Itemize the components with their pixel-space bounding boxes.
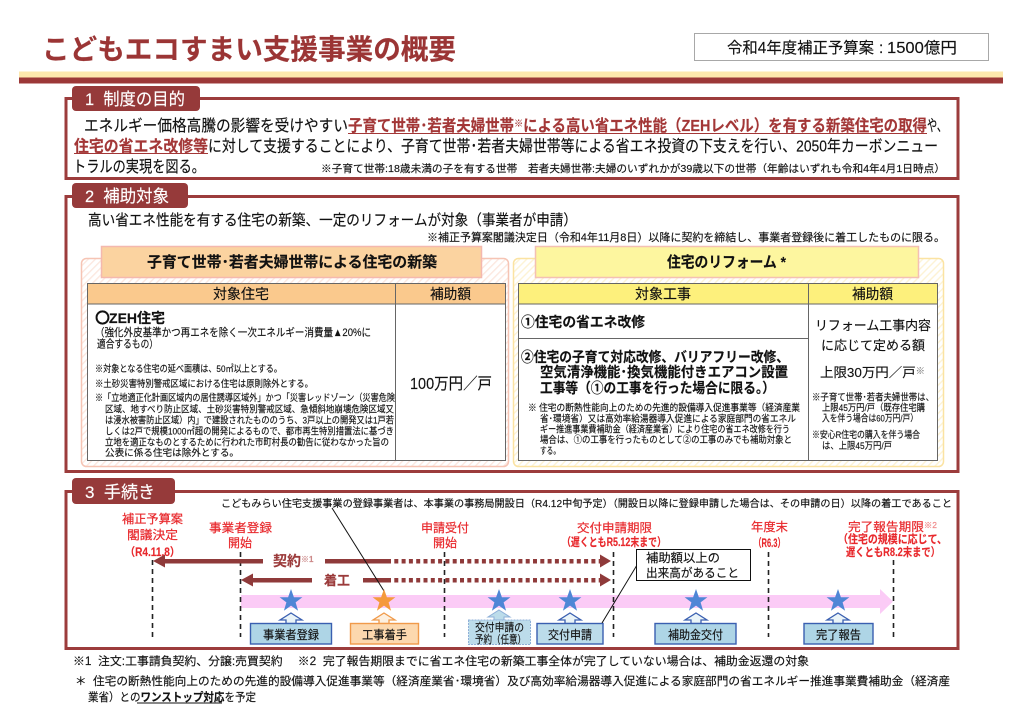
- table: renovation: ※: [916, 366, 925, 376]
- footnote: one-stop service: 業省）とのワンストップ対応を予定: [88, 690, 256, 704]
- header: renovation: [536, 246, 918, 278]
- step: 交付申請の予約: [468, 610, 530, 646]
- table: renovation: する。: [540, 446, 560, 457]
- heading: 2 eligibility: 2 補助対象: [85, 187, 169, 206]
- step: 交付申請の予約: 交付申請の: [475, 620, 524, 634]
- table: new housing: は浸水被害防止区域）内」で建設されたもののうち、3戸以上の開発又は1戸若: [105, 414, 394, 426]
- stars: [280, 589, 849, 611]
- step: 事業者登録: [250, 613, 332, 644]
- table: renovation: 省･環境省）又は高効率給湯器導入促進による家庭部門の省エネル: [540, 413, 796, 425]
- step: 完了報告: [804, 613, 873, 644]
- note: registered businesses: こどもみらい住宅支援事業の登録事業者は、本事業の事務局開設日（R4.12中旬予定）（開設日以降に登録申請した場合は、その申請の日）以降の着工であること: [221, 497, 952, 510]
- table: new housing: 〇ZEH住宅: [95, 307, 165, 328]
- step: 完了報告: 完了報告: [816, 628, 861, 642]
- table: new housing: 適合するもの）: [97, 336, 158, 350]
- panel: 1 purpose: [66, 86, 958, 178]
- panel: 3 procedure: [66, 478, 958, 648]
- footnote: one-stop service: 住宅の断熱性能向上のための先進的設備導入促進事業等（経済産業省･環境省）及び高効率給湯器導入促進による家庭部門の省エネルギー推進事業費補助金（経済産: [93, 674, 950, 688]
- text: purpose body: トラルの実現を図る。: [73, 158, 205, 176]
- subpanel: renovation: [514, 246, 944, 466]
- budget box: 令和4年度補正予算案: [727, 38, 874, 57]
- table: renovation: ※ 住宅の断熱性能向上のための先進的設備導入促進事業等（経済産業: [528, 402, 800, 414]
- milestone labels: 年度末: [751, 520, 788, 534]
- note: household definitions: ※子育て世帯:18歳未満の子を有する世帯 若者夫婦世帯:夫婦のいずれかが39歳以下の世帯（年齢はいずれも令和4年4月1日時点）: [321, 162, 945, 175]
- table: renovation: ※子育て世帯･若者夫婦世帯は、: [812, 392, 934, 404]
- milestone dashed lines: [152, 552, 894, 637]
- arrow: contract: ※1: [301, 555, 314, 564]
- table: renovation: 補助額: [852, 286, 893, 302]
- table: new housing: [88, 284, 506, 460]
- text: purpose body: ※: [514, 119, 523, 130]
- table: renovation: は、上限45万円/戸: [822, 441, 892, 452]
- milestone labels: 完了報告期限: [848, 520, 920, 534]
- callout: work completed: [602, 550, 750, 623]
- table: renovation: リフォーム工事内容: [815, 318, 931, 333]
- budget box: :: [879, 40, 883, 57]
- table: new housing: 補助額: [430, 286, 471, 302]
- table: new housing: ※「立地適正化計画区域内の居住誘導区域外」かつ「災害レッドゾーン（災害危険: [95, 392, 395, 404]
- title: こどもエコすまい支援事業の概要: [42, 34, 456, 65]
- heading: 1 purpose: 1 制度の目的: [85, 90, 185, 109]
- header: new housing: [102, 246, 482, 278]
- step: 工事着手: 工事着手: [362, 627, 407, 642]
- milestone labels: 開始: [228, 536, 252, 550]
- table: new housing: 対象住宅: [213, 286, 269, 302]
- subpanel: new housing: [82, 246, 508, 466]
- table: new housing: ※対象となる住宅の延べ面積は、50㎡以上とする。: [95, 363, 282, 375]
- step: 事業者登録: 事業者登録: [263, 627, 319, 642]
- table: renovation: ギー推進事業費補助金（経済産業省）により住宅の省エネ改修を行う: [540, 424, 790, 436]
- table: new housing: しくは2戸で規模1000㎡超の開発によるもので、都市再生特別措置法に基づき: [105, 426, 394, 438]
- milestone labels: 申請受付: [421, 521, 469, 535]
- callout: work completed: 出来高があること: [646, 565, 739, 580]
- table: new housing: 立地を適正なものとするために行われた市町村長の勧告に従わなかった旨の: [105, 436, 389, 448]
- milestone labels: （住宅の規模に応じて、: [838, 532, 947, 546]
- table: new housing: 100万円／戸: [410, 376, 492, 393]
- arrow: contract: [153, 553, 611, 569]
- table: renovation: 上限45万円/戸（既存住宅購: [822, 402, 925, 414]
- table: new housing: ※土砂災害特別警戒区域における住宅は原則除外とする。: [95, 378, 313, 390]
- table: renovation: 上限30万円／戸: [820, 365, 912, 380]
- table: new housing: 公表に係る住宅は除外とする。: [105, 447, 239, 459]
- budget box: 1500億円: [887, 39, 957, 57]
- table: renovation: ①住宅の省エネ改修: [521, 312, 645, 332]
- milestone labels: 開始: [433, 536, 457, 550]
- text: purpose body: や、: [927, 117, 947, 135]
- arrow: construction start: [241, 573, 611, 588]
- milestone labels: 事業者登録: [209, 520, 272, 535]
- text: eligibility summary: 高い省エネ性能を有する住宅の新築、一定のリフォームが対象（事業者が申請）: [88, 211, 577, 229]
- timeline band arrow: [241, 589, 893, 614]
- header: new housing: 子育て世帯･若者夫婦世帯による住宅の新築: [147, 253, 437, 271]
- text: purpose body: 子育て世帯･若者夫婦世帯: [348, 118, 532, 135]
- table: renovation: ※安心R住宅の購入を伴う場合: [812, 429, 920, 441]
- leader line: registered businesses note: [332, 508, 384, 591]
- table: renovation: 工事等（①の工事を行った場合に限る。）: [540, 378, 775, 398]
- milestone labels: （遅くともR5.12末まで）: [562, 535, 666, 549]
- milestone labels: 閣議決定: [127, 528, 178, 542]
- footnote: one-stop service: [75, 674, 950, 704]
- table: renovation: 空気清浄機能･換気機能付きエアコン設置: [540, 364, 788, 380]
- milestone labels: [122, 511, 947, 559]
- footnote: contract and return: ※1 注文:工事請負契約、分譲:売買契約 ※2 完了報告期限までに省エネ住宅の新築工事全体が完了していない場合は、補助金返還の対象: [73, 654, 810, 668]
- milestone labels: （R6.3）: [754, 536, 785, 550]
- step: 補助金交付: 補助金交付: [668, 628, 723, 642]
- arrow: contract: 契約: [273, 553, 301, 569]
- title band: [19, 72, 1003, 84]
- arrow: construction start: 着工: [324, 573, 350, 588]
- table: renovation: に応じて定める額: [821, 338, 925, 353]
- budget box: [694, 34, 988, 60]
- table: renovation: [518, 284, 938, 460]
- note: eligibility date: ※補正予算案閣議決定日（令和4年11月8日）以降に契約を締結し、事業者登録後に着工したものに限る。: [427, 230, 945, 244]
- step: 交付申請: [537, 613, 603, 644]
- step: 交付申請の予約: 予約（任意）: [475, 632, 526, 646]
- header: renovation: 住宅のリフォーム *: [667, 253, 786, 271]
- table: renovation: 場合は、①の工事を行ったものとして②の工事のみでも補助対象と: [540, 434, 792, 446]
- table: new housing: （強化外皮基準かつ再エネを除く一次エネルギー消費量▲20%に: [95, 325, 371, 339]
- text: purpose body: による高い省エネ性能（ZEHレベル）を有する新築住宅の取得: [523, 116, 927, 135]
- text: purpose body: [73, 116, 947, 176]
- table: renovation: 入を伴う場合は60万円/戸）: [822, 412, 918, 424]
- step: 工事着手: [350, 613, 418, 644]
- text: purpose body: エネルギー価格高騰の影響を受けやすい: [84, 117, 348, 135]
- milestone labels: 交付申請期限: [577, 521, 652, 535]
- milestone labels: 遅くともR8.2末まで）: [846, 545, 940, 559]
- milestone labels: 補正予算案: [122, 511, 183, 526]
- table: new housing: 区域、地すべり防止区域、土砂災害特別警戒区域、急傾斜地崩壊危険区域又: [105, 404, 394, 416]
- milestone labels: ※2: [924, 521, 938, 530]
- milestone labels: （R4.11.8）: [125, 545, 180, 559]
- footnote: one-stop service: ＊: [75, 676, 86, 688]
- panel: 2 eligibility: [66, 183, 958, 472]
- heading: 1 purpose: [72, 86, 200, 111]
- table: renovation: ②住宅の子育て対応改修、バリアフリー改修、: [521, 347, 789, 367]
- heading: 2 eligibility: [72, 183, 188, 208]
- heading: 3 procedure: 3 手続き: [85, 483, 155, 502]
- table: renovation: 対象工事: [635, 286, 691, 302]
- callout: work completed: 補助額以上の: [646, 551, 720, 565]
- step: 補助金交付: [655, 613, 736, 644]
- heading: 3 procedure: [72, 478, 175, 504]
- text: purpose body: 住宅の省エネ改修等: [74, 136, 208, 156]
- step: 交付申請: 交付申請: [548, 628, 592, 642]
